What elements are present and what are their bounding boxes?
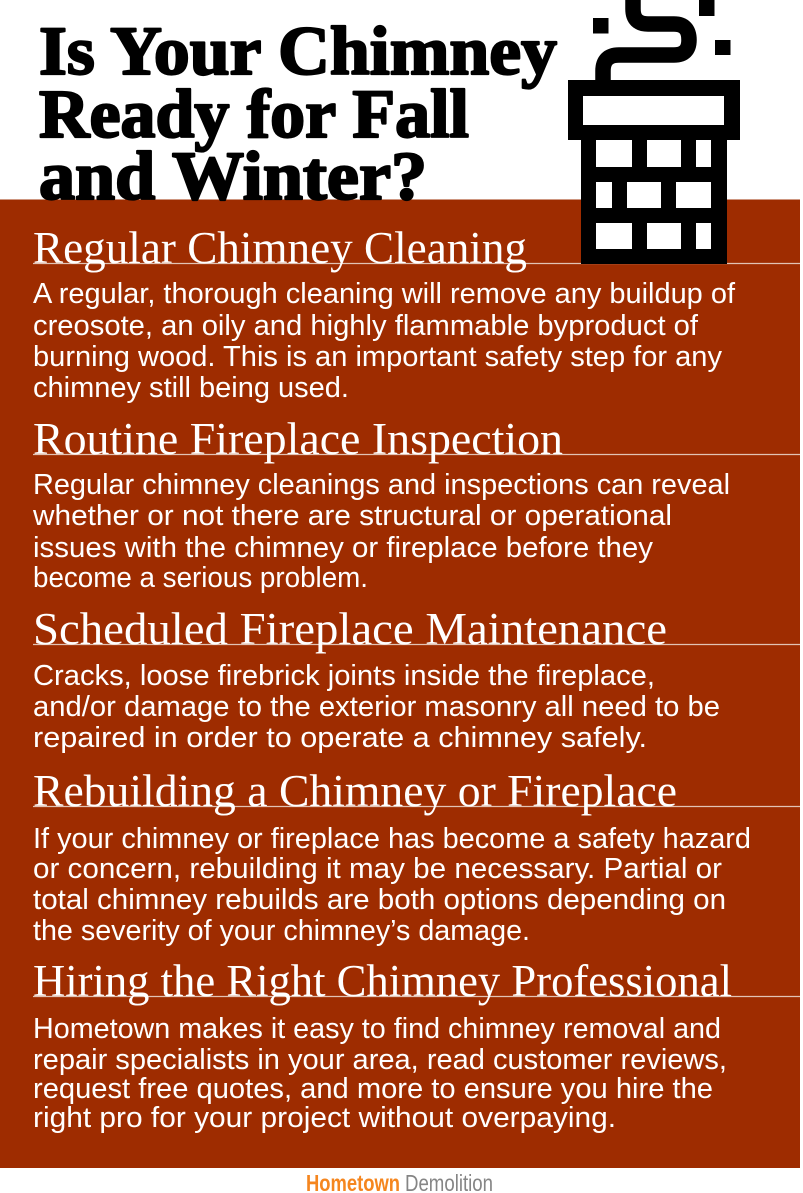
text: scheduled fireplace maintenance: Cracks, loose firebrick joints inside the fireplace, [33,660,655,692]
heading: regular chimney cleaning: Regular Chimney Cleaning [33,223,527,273]
text: rebuilding a chimney or fireplace: If your chimney or fireplace has become a safety hazard [33,823,751,855]
text: hiring the right chimney professional [33,1013,727,1134]
heading: hiring the right chimney professional: Hiring the Right Chimney Professional [33,956,732,1006]
section: routine fireplace inspection [32,414,800,594]
text: hiring the right chimney professional: repair specialists in your area, read customer reviews, [33,1044,727,1076]
text: routine fireplace inspection: whether or not there are structural or operational [32,500,672,532]
footer logo [306,1170,493,1193]
section: hiring the right chimney professional [33,956,800,1134]
title: Is Your Chimney [39,13,557,89]
text: scheduled fireplace maintenance: and/or damage to the exterior masonry all need to be [33,691,720,723]
text: regular chimney cleaning [33,278,735,404]
text: regular chimney cleaning: A regular, thorough cleaning will remove any buildup of [33,278,735,310]
text: rebuilding a chimney or fireplace: the severity of your chimney’s damage. [33,915,530,947]
text: hiring the right chimney professional: Hometown makes it easy to find chimney removal and [33,1013,721,1045]
heading: scheduled fireplace maintenance: Scheduled Fireplace Maintenance [33,604,667,654]
heading: routine fireplace inspection: Routine Fireplace Inspection [33,414,563,464]
section: rebuilding a chimney or fireplace [33,766,800,947]
title: and Winter? [39,138,427,214]
text: routine fireplace inspection [32,469,730,594]
text: hiring the right chimney professional: request free quotes, and more to ensure you hire the [33,1073,713,1105]
text: regular chimney cleaning: creosote, an oily and highly flammable byproduct of [33,310,698,342]
text: rebuilding a chimney or fireplace: total chimney rebuilds are both options depending on [33,884,726,916]
text: hiring the right chimney professional: right pro for your project without overpaying. [33,1102,616,1134]
title: Ready for Fall [39,76,469,152]
section: regular chimney cleaning [33,223,800,404]
text: scheduled fireplace maintenance: repaired in order to operate a chimney safely. [33,722,647,754]
text: rebuilding a chimney or fireplace [33,823,751,947]
text: regular chimney cleaning: burning wood. This is an important safety step for any [33,341,723,373]
text: scheduled fireplace maintenance [33,660,720,754]
text: routine fireplace inspection: issues with the chimney or fireplace before they [33,532,654,564]
text: rebuilding a chimney or fireplace: or concern, rebuilding it may be necessary. Partial or [33,853,723,885]
heading: rebuilding a chimney or fireplace: Rebuilding a Chimney or Fireplace [33,766,677,816]
title [39,13,557,214]
text: routine fireplace inspection: become a serious problem. [33,562,368,594]
text: regular chimney cleaning: chimney still being used. [33,372,349,404]
section: scheduled fireplace maintenance [33,604,800,754]
text: routine fireplace inspection: Regular chimney cleanings and inspections can reveal [33,469,730,501]
icon: chimney with smoke [568,0,740,264]
